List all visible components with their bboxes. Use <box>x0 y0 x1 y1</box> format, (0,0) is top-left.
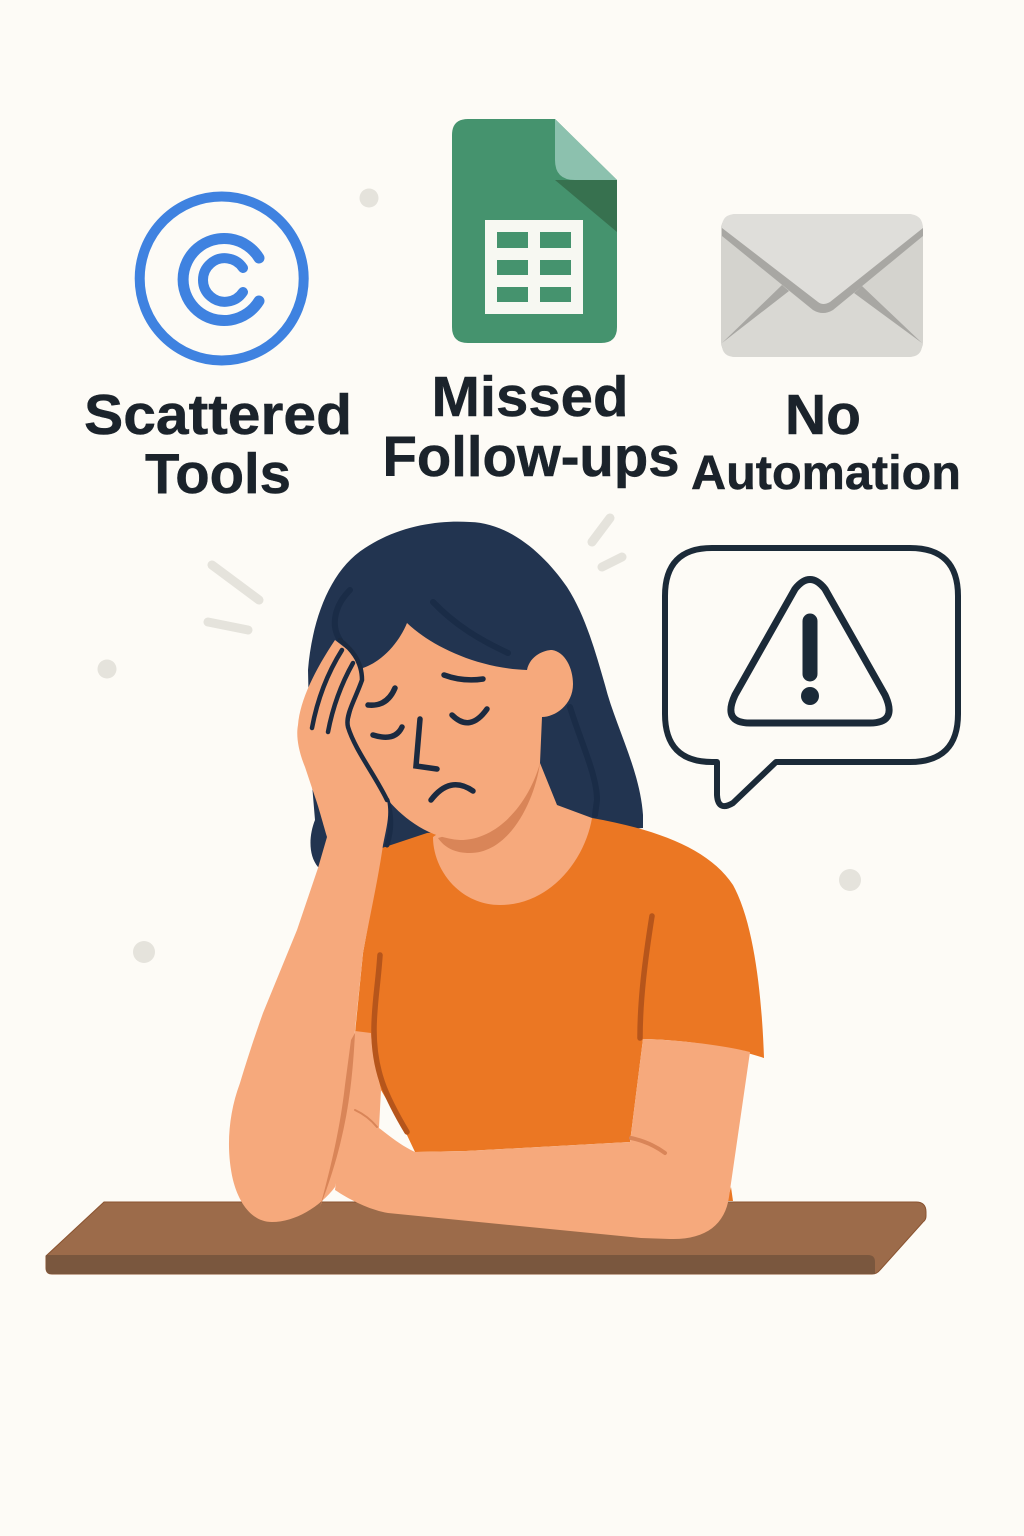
table <box>46 1202 926 1274</box>
heading: automation: Automation <box>691 447 961 500</box>
heading: tools: Tools <box>145 442 291 506</box>
hand and finger lines <box>312 640 387 800</box>
hair strand fringe <box>433 602 508 653</box>
icon: spreadsheet file <box>452 119 617 343</box>
neck shadow <box>438 763 540 853</box>
heading: no: No <box>785 383 861 447</box>
icon: scattered tools circle <box>140 196 304 360</box>
illustration: tired woman at desk <box>229 522 764 1239</box>
hair strand temple <box>335 590 350 640</box>
face details <box>368 675 487 800</box>
shirt and arm creases <box>355 916 665 1153</box>
icon: warning speech bubble <box>665 548 958 806</box>
icon: envelope <box>721 214 923 357</box>
face <box>348 623 573 840</box>
arm crease <box>320 1033 355 1207</box>
hair back <box>308 522 643 867</box>
neck <box>433 763 592 905</box>
heading: scattered: Scattered <box>84 383 352 447</box>
decorative dots and stress marks <box>98 188 861 963</box>
heading: follow-ups: Follow-ups <box>382 425 680 489</box>
heading: missed: Missed <box>432 365 628 429</box>
arm holding head <box>229 640 388 1222</box>
hair strand below hand <box>387 800 391 845</box>
hair strand right <box>570 707 597 815</box>
shirt <box>355 818 764 1152</box>
forearm on table <box>335 1031 750 1239</box>
shirt sliver at elbow <box>727 1187 733 1201</box>
